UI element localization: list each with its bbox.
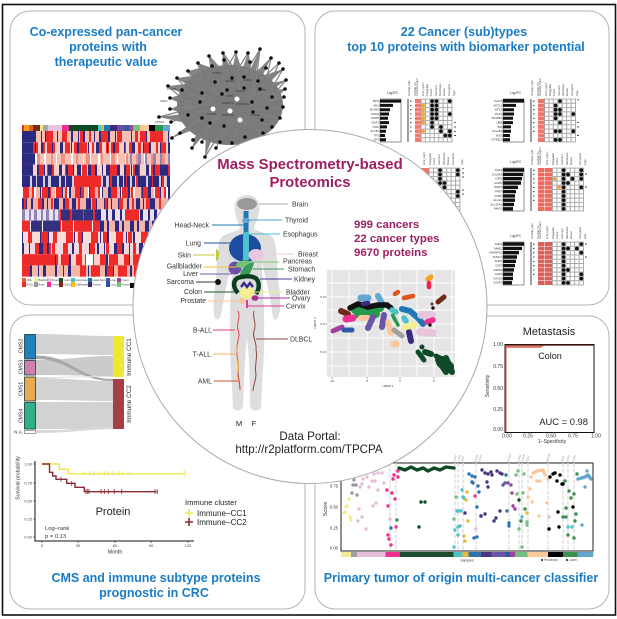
heatmap legend: AML [26, 278, 33, 282]
biomarker table 1: Oncogene [447, 83, 451, 96]
biomarker table 2: PGK1 [495, 112, 503, 116]
biomarker table 1: CD300 [371, 116, 379, 120]
heatmap legend: Liver [110, 278, 116, 282]
biomarker table 5: GAPA [495, 272, 502, 276]
UMAP scatter plot: UMAP 1 [382, 384, 394, 388]
organ labels: Pancreas [283, 258, 313, 266]
biomarker table 4: Tumor [555, 157, 559, 165]
classifier top labels: Ovary [506, 453, 512, 462]
biomarker table 1: GPX [373, 138, 379, 142]
organ labels: Sarcoma [166, 279, 194, 286]
survival plot: Month [108, 550, 122, 556]
legend: immune cluster: Immune cluster [185, 498, 237, 507]
biomarker table 2: Log2FC [510, 91, 522, 95]
classifier top labels: Lung [473, 454, 479, 462]
biomarker table 5: NUDC1 [493, 255, 502, 259]
biomarker table 5: Nominal_logFC [538, 221, 542, 239]
survival plot [16, 456, 247, 556]
heatmap legend: Kidney [92, 282, 101, 286]
ROC curve [485, 326, 601, 445]
ROC curve: 1−Specificity [538, 439, 567, 445]
heatmap cancer colour bar [22, 125, 170, 131]
heading: co-expressed: Co-expressed pan-cancer [30, 25, 183, 39]
survival plot: Survival probability [16, 456, 22, 500]
network graph: HNRNPK [222, 113, 234, 117]
classifier scatter plot [323, 452, 593, 562]
heatmap legend [22, 278, 134, 288]
biomarker table 1: Intra_logFC [421, 82, 425, 96]
ROC curve: 0.75 [493, 364, 503, 370]
biomarker table 3: Type [460, 159, 464, 165]
biomarker table 5: CASP1 [493, 281, 502, 285]
biomarker table 1: ADA [373, 103, 379, 107]
classifier top labels: Colon [520, 453, 526, 462]
heatmap legend: Cervix [52, 282, 60, 286]
body map [166, 195, 318, 428]
heading: CMS: CMS and immune subtype proteins [51, 571, 261, 585]
heading: biomarkers: 22 Cancer (sub)types [401, 25, 527, 39]
biomarker table 1: Secreted [434, 85, 438, 96]
biomarker table 1: TNXL [372, 125, 380, 129]
ROC curve: 0.50 [546, 434, 556, 440]
biomarker table 4: Type [583, 159, 587, 165]
biomarker table 1 [370, 78, 456, 142]
biomarker table 5: Intra_logFC [545, 225, 549, 239]
survival plot: p = 0.13 [45, 534, 66, 540]
biomarker table 2: Type [575, 90, 579, 96]
ROC curve: 0.25 [493, 407, 503, 413]
classifier top labels: Lung [571, 454, 577, 462]
biomarker table 4: Membrane [565, 152, 569, 165]
heatmap legend: Head-Neck [92, 278, 107, 282]
network graph: PSMB5 [167, 87, 177, 91]
survival plot: 60 [113, 543, 118, 548]
biomarker table 5: HSPA5 [493, 268, 502, 272]
biomarker table 3 [415, 151, 464, 211]
organ labels: Ovary [292, 296, 311, 302]
biomarker table 1: TPO [373, 133, 379, 137]
biomarker table 4 [490, 147, 587, 211]
biomarker table 2: COL18A [492, 129, 502, 133]
biomarker table 2: NSG [496, 133, 502, 137]
survival plot: 0.00 [24, 534, 33, 540]
heatmap legend: DLBCL [64, 282, 73, 286]
network graph: LMNB1 [207, 112, 217, 116]
classifier top labels: Breast [545, 452, 551, 462]
UMAP scatter plot: UMAP 2 [313, 317, 317, 329]
survival plot: 0.75 [24, 480, 33, 486]
biomarker table 5 [489, 221, 587, 285]
biomarker table 2 [491, 78, 579, 142]
organ labels [166, 202, 318, 386]
network graph: HSPD1 [257, 88, 267, 92]
biomarker table 1: Tumor [429, 88, 433, 96]
biomarker table 5: AGR3 [495, 242, 502, 246]
biomarker table 4: Intra_logFC [545, 151, 549, 165]
biomarker table 4: HMOX [494, 207, 502, 211]
classifier top labels: Liver [477, 455, 483, 462]
survival plot: 0.25 [24, 516, 33, 522]
biomarker table 1: MPO [373, 99, 379, 103]
biomarker table 4: Overlap_rIC [536, 151, 540, 165]
UMAP scatter plot: -5 [366, 379, 369, 383]
biomarker table 2: UBB [496, 120, 502, 124]
ROC curve: AUC = 0.98 [539, 416, 588, 427]
UMAP clusters [333, 277, 452, 372]
organ leader lines [193, 204, 294, 381]
organ labels: Cervix [286, 304, 306, 310]
ROC curve: 0.50 [493, 386, 503, 392]
classifier scatter plot: 0.75 [330, 484, 339, 488]
network graph: HSP90 [243, 78, 252, 82]
biomarker table 4: LGR5 [495, 177, 502, 181]
biomarker table 2: Overlap_right [530, 80, 534, 96]
biomarker table 1: Overlap_rIC [413, 82, 417, 96]
network graph: KPNA2 [155, 120, 165, 124]
biomarker table 2: Oncogene [570, 83, 574, 96]
sankey diagram: N.A. [14, 430, 23, 436]
biomarker table 2: KIF14 [495, 108, 503, 112]
classifier scatter plot: Samples [460, 558, 474, 562]
sankey diagram: Immune CC1 [126, 338, 133, 376]
biomarker table 2: Secreted [557, 85, 561, 96]
biomarker table 3: Tumor [432, 157, 436, 165]
heading: co-expressed: therapeutic value [55, 55, 157, 69]
biomarker table 4: Overlap_right [530, 149, 534, 165]
sankey diagram: CMS4 [18, 409, 24, 423]
organ labels: Breast [298, 252, 318, 258]
biomarker table 1: Type [452, 90, 456, 96]
organ labels: Brain [292, 202, 308, 208]
biomarker table 5: MME1 [494, 246, 503, 250]
sankey diagram: CMS2 [18, 339, 24, 353]
biomarker table 4: PCBP [495, 194, 502, 198]
biomarker table 5: CD97 [495, 264, 503, 268]
heatmap legend: Bladder [38, 278, 48, 282]
heatmap legend: Gallbladder [76, 282, 89, 286]
survival plot: 0 [41, 543, 44, 548]
ROC curve: 0.25 [523, 434, 533, 440]
heatmap legend: Pancreas [122, 282, 134, 286]
statistics: 999 cancers [354, 219, 419, 231]
biomarker table 1: Log2FC [387, 91, 399, 95]
biomarker table 3: Intra_logFC [422, 151, 426, 165]
organ labels: Skin [178, 252, 191, 260]
biomarker table 5: HNRNPA1 [489, 251, 502, 255]
statistics: 22 cancer types [354, 233, 440, 245]
classifier top labels: Skin [460, 455, 466, 462]
main title: Mass Spectrometry-based [217, 157, 403, 173]
biomarker table 5: AGR2 [495, 259, 502, 263]
organ labels: T-ALL [193, 352, 211, 358]
classifier top labels [452, 452, 577, 462]
biomarker table 5: Membrane [565, 226, 569, 239]
biomarker table 5: Druggable [551, 226, 555, 239]
organs [215, 198, 264, 391]
network graph: TOP2A [251, 113, 260, 117]
legend: immune cluster [185, 498, 247, 527]
curve: Immune-CC2 [42, 464, 157, 492]
classifier scatter plot: Prediction [544, 558, 558, 562]
biomarker table 5: Log2FC [510, 234, 522, 238]
survival plot: 120 [185, 543, 192, 548]
heading: biomarkers: top 10 proteins with biomarker potential [347, 40, 585, 54]
biomarker table 1: Overlap_right [407, 80, 411, 96]
ROC curve: 0.75 [568, 434, 578, 440]
classifier scatter plot: 0.00 [330, 546, 339, 550]
sex labels: F [252, 419, 257, 428]
network graph: CAND1 [225, 79, 235, 83]
biomarker table 3: Kinase [446, 157, 450, 165]
panel: biomarkers [315, 11, 609, 305]
biomarker table 2: PLAT3 [494, 99, 502, 103]
ROC curve: 1.00 [591, 434, 601, 440]
ROC curve: Sensitivity [485, 374, 491, 397]
biomarker table 4: Kinase [569, 157, 573, 165]
biomarker table 2: Nominal_logFC [538, 78, 542, 96]
biomarker table 2: Tumor [552, 88, 556, 96]
main title: Proteomics [269, 175, 351, 191]
biomarker table 5: Oncogene [578, 226, 582, 239]
organ labels: Colon [184, 289, 202, 296]
organ labels: Head-Neck [175, 222, 210, 230]
biomarker table 4: SLC16A3 [490, 202, 502, 206]
heading: CMS: prognostic in CRC [99, 586, 209, 600]
biomarker table 5: Overlap_rIC [536, 225, 540, 239]
biomarker table 2: Kinase [565, 88, 569, 96]
biomarker table 3: Druggable [428, 152, 432, 165]
organ labels: B-ALL [193, 328, 212, 334]
classifier top labels: Skin [525, 455, 531, 462]
biomarker table 5: COX2A [493, 276, 502, 280]
biomarker table 2: Membrane [561, 83, 565, 96]
UMAP scatter plot: 5.0 [320, 295, 325, 299]
biomarker table 4: Oncogene [578, 152, 582, 165]
biomarker table 5: Secreted [560, 228, 564, 239]
biomarker table 1: Kinase [442, 88, 446, 96]
organ labels: Stomach [288, 266, 315, 274]
biomarker table 2: BSI [498, 125, 502, 129]
biomarker table 3: Membrane [442, 152, 446, 165]
curve: Immune-CC1 [42, 464, 185, 474]
organ labels: DLBCL [290, 336, 312, 344]
central circle [133, 130, 487, 484]
classifier top labels: Lung [516, 454, 522, 462]
biomarker table 4: COL6A3 [492, 172, 503, 176]
biomarker table 4: Secreted [560, 154, 564, 165]
sex labels: M [236, 419, 242, 428]
heatmap rows [22, 131, 170, 277]
biomarker table 2: CRABP2 [491, 116, 502, 120]
legend: immune cluster: Immune−CC2 [197, 518, 247, 527]
biomarker table 4: PFKP [495, 190, 502, 194]
organ labels: Esophagus [283, 232, 318, 238]
data portal text: http://r2platform.com/TPCPA [235, 443, 383, 456]
organ labels: Bladder [286, 290, 310, 296]
heatmap legend: Colon [64, 278, 71, 282]
UMAP scatter plot: 0.0 [320, 322, 325, 326]
biomarker table 1: SHIP1 [371, 120, 379, 124]
organ labels: Liver [183, 271, 199, 278]
biomarker table 4: Nominal_logFC [538, 147, 542, 165]
classifier scatter plot: 0.50 [330, 504, 339, 510]
heading: co-expressed: proteins with [69, 40, 147, 54]
ROC curve: 0.00 [502, 434, 512, 440]
classifier top labels: Liver [452, 455, 458, 462]
ROC curve: 1.00 [493, 342, 503, 348]
classifier points [344, 467, 591, 547]
panel: CMS prognostic [10, 315, 305, 609]
survival plot: Protein [96, 506, 130, 518]
classifier scatter plot: Label [569, 558, 577, 562]
classifier top labels: Skin [560, 455, 566, 462]
network graph: HNRNPA1 [236, 102, 250, 106]
biomarker table 2: CTNND2 [491, 138, 502, 142]
statistics: 9670 proteins [354, 247, 427, 259]
panel: co-expressed proteins [10, 11, 305, 305]
legend: immune cluster: Immune−CC1 [197, 509, 247, 518]
heatmap [22, 125, 170, 288]
survival plot: 90 [149, 543, 154, 548]
UMAP scatter plot: 0 [399, 379, 401, 383]
classifier top labels: Liver [565, 455, 571, 462]
biomarker table 2: Intra_logFC [544, 82, 548, 96]
biomarker table 2: KRT13 [494, 103, 502, 107]
survival plot: 0.50 [24, 498, 33, 504]
sankey diagram: CMS3 [18, 360, 24, 374]
heatmap legend: B-ALL [26, 282, 34, 286]
biomarker table 4: ALG2A [493, 198, 502, 202]
survival plot: 1.00 [24, 462, 33, 466]
sankey diagram [14, 334, 133, 436]
ROC curve: Metastasis [523, 326, 576, 338]
heatmap legend: Esophagus [76, 278, 90, 282]
biomarker table 5: Overlap_right [530, 223, 534, 239]
organ labels: Kidney [294, 276, 316, 284]
network graph: HSPA1 [236, 89, 245, 93]
biomarker table 1: SLC5A [370, 129, 379, 133]
heatmap legend: Breast [52, 278, 60, 282]
body silhouette [213, 195, 280, 411]
biomarker table 3: Secreted [437, 154, 441, 165]
classifier scatter plot: Score [323, 502, 329, 516]
biomarker table 1: CD304 [371, 112, 379, 116]
classifier colour bar [341, 552, 593, 557]
organ labels: Gallbladder [167, 264, 203, 270]
biomarker table 1: Druggable [425, 83, 429, 96]
network graph [155, 49, 286, 157]
heading: classifier: Primary tumor of origin multi-cancer classifier [324, 571, 598, 585]
data portal text: Data Portal: [279, 430, 341, 443]
organ labels: AML [198, 378, 212, 386]
biomarker table 4: Druggable [551, 152, 555, 165]
UMAP scatter plot [313, 270, 455, 388]
organ labels: Prostate [180, 298, 206, 305]
biomarker table 4: AGR3 [495, 168, 502, 172]
biomarker table 1: Nominal_logFC [415, 78, 419, 96]
biomarker table 4: Log2FC [510, 160, 522, 164]
heatmap legend: Lung [110, 282, 117, 286]
biomarker table 5: Kinase [569, 231, 573, 239]
survival plot: 30 [76, 543, 81, 548]
heatmap legend: Ovary [122, 278, 129, 282]
UMAP scatter plot: -5.0 [319, 350, 325, 354]
classifier top labels: Lung [456, 454, 462, 462]
biomarker table 2: Overlap_rIC [536, 82, 540, 96]
network graph: PSMC1 [212, 71, 222, 75]
UMAP scatter plot: -10 [330, 379, 334, 383]
biomarker table 5: Tumor [555, 231, 559, 239]
biomarker table 4: AGRN [494, 181, 502, 185]
ROC curve: 0.00 [493, 427, 503, 433]
network graph: CDK1 [160, 99, 168, 103]
biomarker table 5: Type [583, 233, 587, 239]
biomarker table 1: Membrane [438, 83, 442, 96]
immune cluster boxes [113, 336, 124, 429]
classifier scatter plot: 0.25 [330, 526, 339, 530]
panel: classifier [315, 316, 609, 609]
survival plot: Log−rank [45, 526, 69, 532]
biomarker table 3: Oncogene [451, 152, 455, 165]
heatmap legend: Brain [38, 282, 45, 286]
sankey diagram: CMS1 [18, 382, 24, 396]
ROC curve: Colon [538, 351, 562, 361]
CMS boxes [24, 334, 36, 434]
network graph: HNRNPC [222, 101, 234, 105]
UMAP scatter plot: 5 [433, 379, 435, 383]
biomarker table 2: Druggable [548, 83, 552, 96]
sankey diagram: Immune CC2 [126, 385, 133, 423]
biomarker table 4: MSMT [494, 185, 502, 189]
organ labels: Lung [186, 240, 201, 248]
network graph: XPO1 [226, 94, 234, 98]
organ labels: Thyroid [285, 218, 308, 224]
biomarker table 1: BLANK [370, 108, 379, 112]
